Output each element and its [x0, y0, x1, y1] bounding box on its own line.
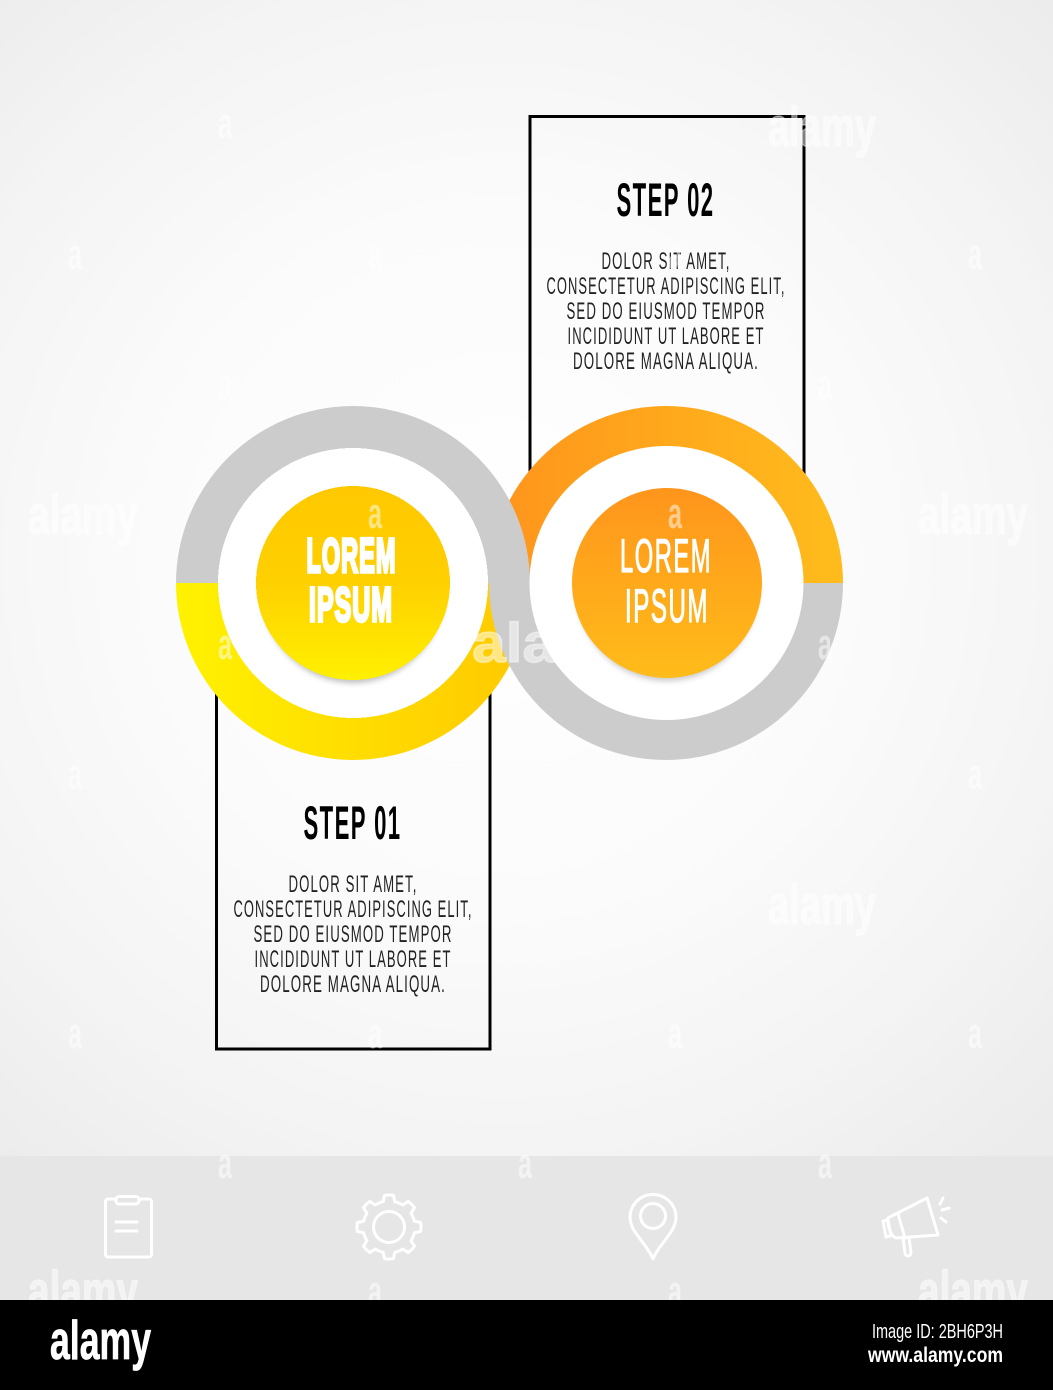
- watermark: alamy pattern: a: [368, 230, 382, 279]
- text block: step 01 description: SED DO EIUSMOD TEMPOR: [254, 921, 452, 948]
- image id: Image ID: 2BH6P3H: [872, 1321, 1003, 1343]
- outlined box: step 02: [530, 116, 804, 480]
- watermark: alamy pattern: a: [968, 1009, 982, 1058]
- ring segment: yellow bottom of left circle: [176, 583, 530, 760]
- watermark: alamy pattern: a: [368, 489, 382, 538]
- circle: left step badge: [218, 448, 488, 718]
- text block: step 02 description: DOLORE MAGNA ALIQUA.: [573, 348, 759, 375]
- footer logo: alamy: [50, 1309, 151, 1371]
- watermark: alamy pattern: a: [668, 230, 682, 279]
- watermark: alamy pattern: a: [218, 360, 232, 409]
- watermark: alamy pattern: a: [368, 1267, 382, 1316]
- text block: step 02 description: DOLOR SIT AMET,: [602, 248, 730, 275]
- text block: step 02 description: [546, 248, 786, 375]
- icon: clipboard: [106, 1196, 152, 1257]
- text block: step 01 description: [234, 871, 472, 998]
- circle: left step badge: LOREM: [306, 530, 396, 583]
- watermark: alamy pattern: a: [818, 1139, 832, 1188]
- watermark: alamy pattern: a: [818, 360, 832, 409]
- watermark: alamy pattern: a: [668, 489, 682, 538]
- label: right badge text: [620, 529, 712, 632]
- ring segment: grey bottom of right circle: [489, 583, 843, 760]
- watermark: alamy pattern: ala: [472, 611, 557, 674]
- ring segment: grey top of left circle: [176, 406, 530, 583]
- watermark: alamy pattern: a: [518, 1139, 532, 1188]
- text block: step 01 description: INCIDIDUNT UT LABORE ET: [254, 946, 452, 973]
- label: right badge text: LOREM: [620, 529, 712, 582]
- bottom icon band: [0, 1156, 1053, 1300]
- watermark: alamy pattern: a: [68, 1009, 82, 1058]
- icon: megaphone: [883, 1198, 949, 1256]
- watermark: alamy pattern: alamy: [28, 483, 138, 546]
- ring segment: orange top of right circle: [489, 406, 843, 583]
- watermark: alamy pattern: a: [968, 750, 982, 799]
- watermark: alamy pattern: alamy: [28, 1259, 138, 1322]
- text block: step 02 description: SED DO EIUSMOD TEMPOR: [566, 298, 766, 325]
- text block: step 02 description: CONSECTETUR ADIPISCING ELIT,: [546, 273, 786, 300]
- text block: step 01 description: DOLORE MAGNA ALIQUA.: [260, 971, 446, 998]
- watermark: alamy pattern: a: [218, 620, 232, 669]
- watermark: alamy pattern: a: [818, 620, 832, 669]
- watermark: alamy pattern: a: [368, 1009, 382, 1058]
- website: www.alamy.com: [867, 1344, 1003, 1367]
- infographic canvas: STEP 01: [304, 796, 402, 849]
- watermark: alamy pattern: a: [218, 1139, 232, 1188]
- circle: right step badge: [530, 446, 804, 720]
- text block: step 02 description: INCIDIDUNT UT LABORE ET: [568, 323, 764, 350]
- watermark: alamy pattern: alamy: [768, 873, 876, 936]
- watermark: alamy pattern: alamy: [768, 95, 876, 158]
- outlined box: step 01: [216, 690, 490, 1049]
- footer bar: [0, 1300, 1053, 1390]
- watermark: alamy pattern: a: [968, 230, 982, 279]
- watermark: alamy pattern: a: [68, 230, 82, 279]
- watermark: alamy pattern: a: [68, 750, 82, 799]
- label: right badge text: IPSUM: [625, 579, 709, 632]
- watermark: alamy pattern: a: [668, 1009, 682, 1058]
- watermark: alamy pattern: a: [668, 1267, 682, 1316]
- text block: step 01 description: CONSECTETUR ADIPISCING ELIT,: [234, 896, 472, 923]
- label: left badge text: IPSUM: [309, 579, 393, 632]
- icon: gear: [357, 1195, 421, 1259]
- icon: map pin: [630, 1194, 676, 1259]
- watermark: alamy pattern: a: [218, 99, 232, 148]
- text block: step 01 description: DOLOR SIT AMET,: [288, 871, 418, 898]
- infographic canvas: STEP 02: [616, 173, 714, 226]
- label: left badge text: [306, 530, 396, 632]
